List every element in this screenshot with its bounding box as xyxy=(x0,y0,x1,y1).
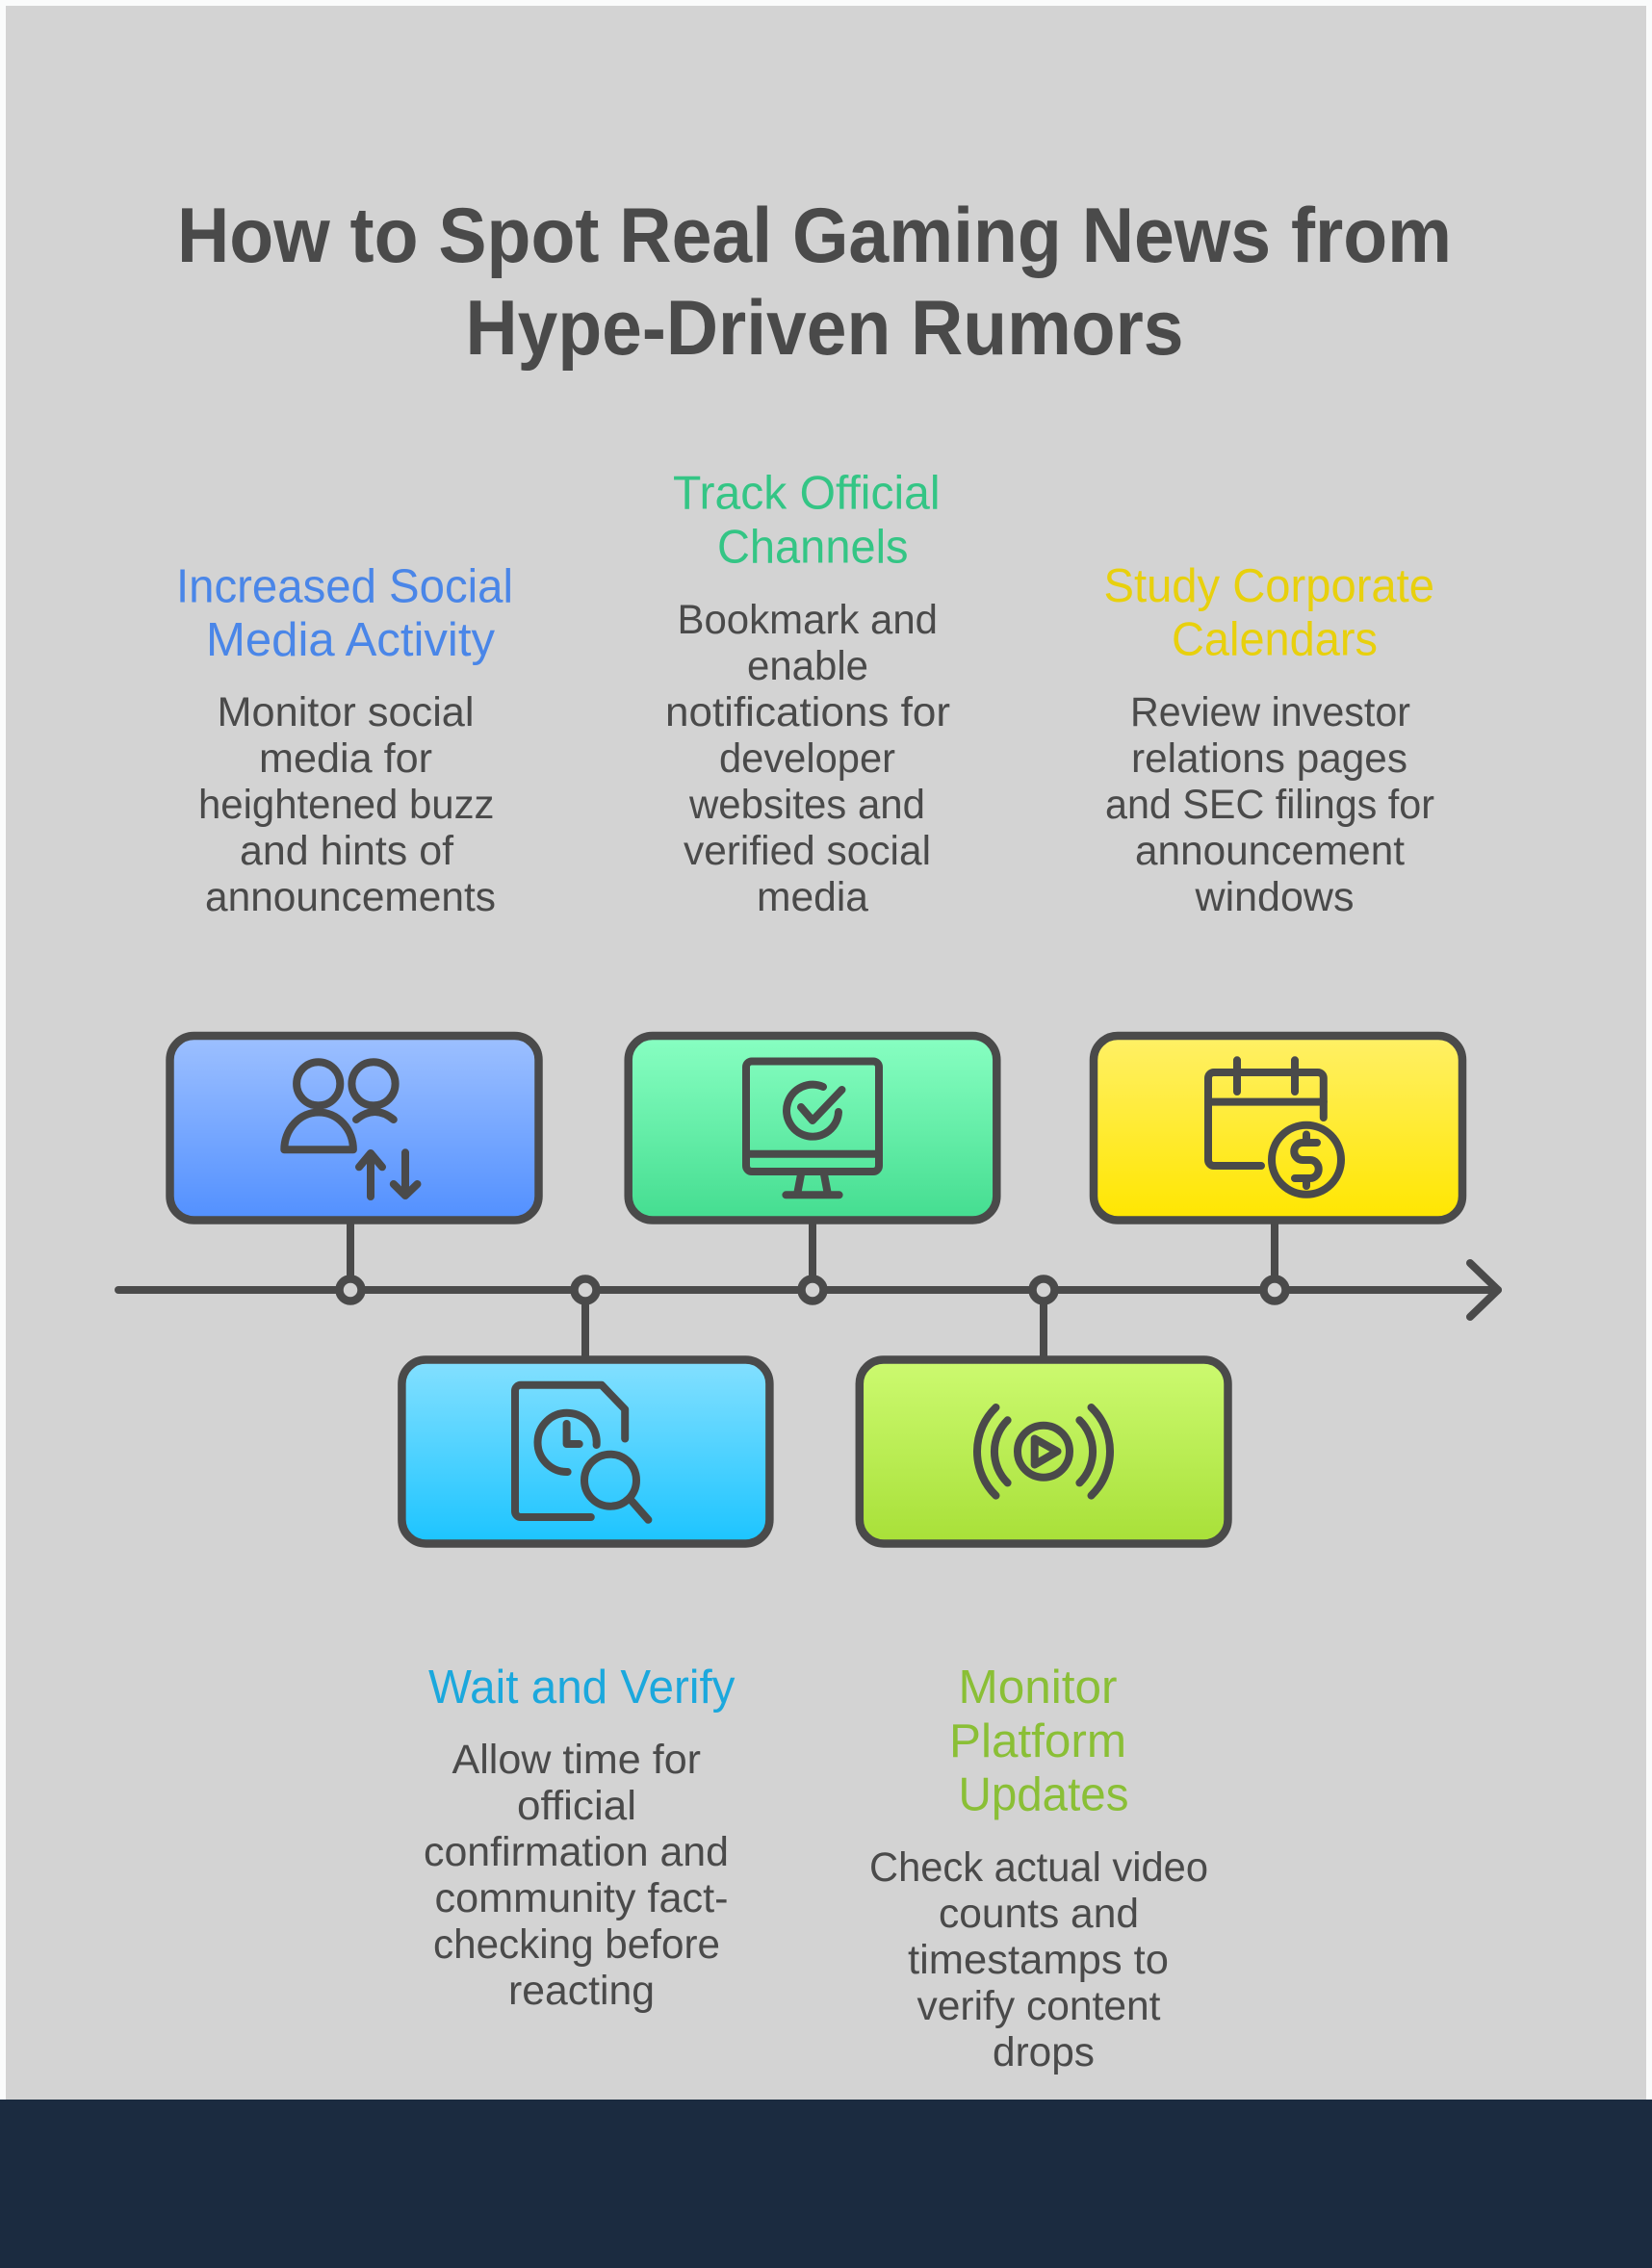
text block: Wait and Verify xyxy=(424,1662,736,2014)
heading: Study Corporate Calendars: Study Corporate xyxy=(1103,560,1434,612)
card: corporate calendars xyxy=(1094,1036,1462,1221)
description: bookmark official sources: enable xyxy=(747,643,868,689)
description: allow time for confirmation: reacting xyxy=(508,1968,655,2014)
description: allow time for confirmation: confirmation and xyxy=(424,1829,729,1875)
description: check video counts: timestamps to xyxy=(908,1937,1169,1983)
heading: Monitor Platform Updates: Monitor xyxy=(959,1662,1117,1714)
heading: Wait and Verify: Wait and Verify xyxy=(428,1662,736,1714)
icon: calendar with dollar coin xyxy=(1208,1060,1341,1195)
title xyxy=(177,193,1452,372)
description: bookmark official sources: verified social xyxy=(684,828,931,874)
arrow head xyxy=(1470,1263,1498,1317)
description: review investor pages: relations pages xyxy=(1131,735,1407,782)
card: official channels xyxy=(629,1036,996,1221)
heading: Monitor Platform Updates xyxy=(949,1662,1128,1821)
description: bookmark official sources xyxy=(665,597,950,920)
description: monitor social media: media for xyxy=(259,735,432,782)
description: review investor pages: Review investor xyxy=(1130,689,1410,735)
description: allow time for confirmation xyxy=(424,1737,729,2014)
description: monitor social media xyxy=(198,689,496,920)
connector stems xyxy=(350,1223,1275,1357)
text block: Increased Social Media Activity xyxy=(176,560,513,920)
heading: Monitor Platform Updates: Updates xyxy=(959,1769,1128,1821)
description: check video counts: verify content xyxy=(916,1983,1161,2029)
heading: Track Official Channels: Track Official xyxy=(673,468,940,520)
heading: Increased Social Media Activity: Media Activity xyxy=(206,614,495,666)
heading: Increased Social Media Activity xyxy=(176,560,513,666)
icon: broadcasting play button xyxy=(977,1407,1110,1496)
title: Hype-Driven Rumors xyxy=(466,285,1184,372)
description: monitor social media: heightened buzz xyxy=(198,782,495,828)
description: check video counts: drops xyxy=(993,2029,1095,2075)
description: allow time for confirmation: community fact- xyxy=(435,1875,728,1921)
description: review investor pages: announcement xyxy=(1135,828,1405,874)
description: allow time for confirmation: checking before xyxy=(433,1921,720,1968)
description: check video counts: counts and xyxy=(939,1891,1139,1937)
footer band xyxy=(0,2100,1652,2268)
description: bookmark official sources: media xyxy=(757,874,868,920)
timeline axis xyxy=(118,1286,1498,1294)
description: review investor pages xyxy=(1105,689,1434,920)
heading: Study Corporate Calendars xyxy=(1103,560,1434,666)
icon: document with clock and magnifier xyxy=(515,1385,648,1520)
timeline xyxy=(118,1223,1498,1357)
timeline nodes xyxy=(339,1278,1286,1302)
description: bookmark official sources: developer xyxy=(719,735,895,782)
text block: Study Corporate Calendars xyxy=(1103,560,1434,920)
description: bookmark official sources: notifications for xyxy=(665,689,950,735)
description: monitor social media: and hints of xyxy=(240,828,454,874)
description: bookmark official sources: Bookmark and xyxy=(678,597,938,643)
card: platform updates xyxy=(860,1359,1228,1544)
description: review investor pages: windows xyxy=(1194,874,1354,920)
description: check video counts: Check actual video xyxy=(869,1844,1208,1891)
description: check video counts xyxy=(869,1844,1208,2075)
heading: Track Official Channels xyxy=(673,468,940,574)
heading: Monitor Platform Updates: Platform xyxy=(949,1715,1126,1767)
description: allow time for confirmation: official xyxy=(517,1783,636,1829)
card: social media activity xyxy=(169,1036,539,1221)
icon: monitor with check xyxy=(746,1061,879,1195)
description: allow time for confirmation: Allow time for xyxy=(452,1737,701,1783)
icon: people with arrows xyxy=(284,1062,418,1197)
heading: Track Official Channels: Channels xyxy=(717,522,909,574)
card: wait and verify xyxy=(401,1359,769,1544)
text block: Monitor Platform Updates xyxy=(869,1662,1208,2075)
heading: Study Corporate Calendars: Calendars xyxy=(1172,614,1378,666)
heading: Increased Social Media Activity: Increased Social xyxy=(176,560,513,612)
description: bookmark official sources: websites and xyxy=(688,782,925,828)
title: How to Spot Real Gaming News from xyxy=(177,193,1452,279)
description: review investor pages: and SEC filings for xyxy=(1105,782,1434,828)
description: monitor social media: Monitor social xyxy=(218,689,474,735)
text block: Track Official Channels xyxy=(665,468,950,920)
description: monitor social media: announcements xyxy=(205,874,496,920)
